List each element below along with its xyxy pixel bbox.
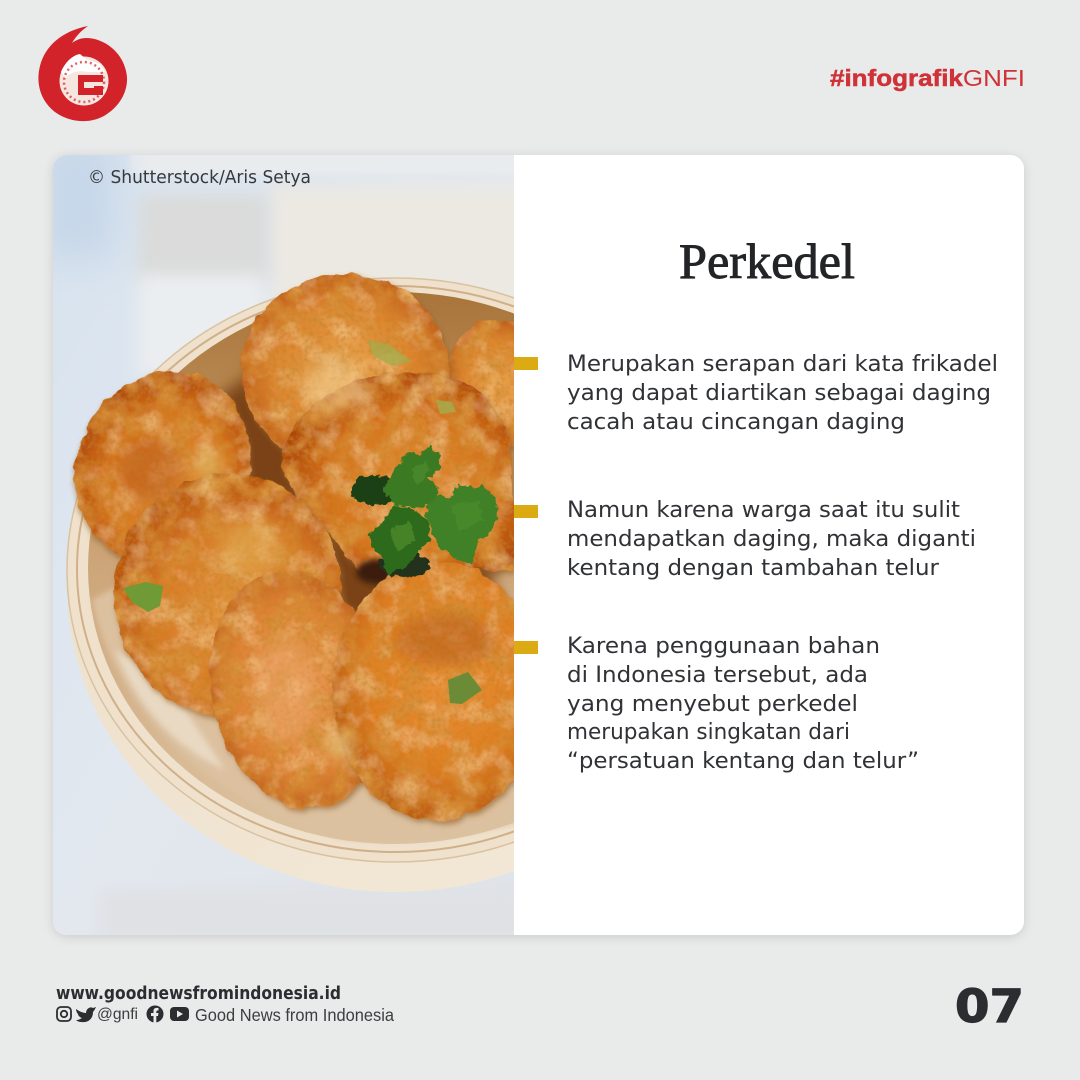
title: Perkedel: [679, 233, 855, 289]
text block 1: [567, 351, 998, 435]
text block 3: Karena penggunaan bahan: [567, 633, 880, 659]
bullet marker 2: [514, 505, 538, 518]
patties: [70, 272, 514, 828]
icon: twitter: [76, 1007, 96, 1022]
shadow beneath patties: [218, 370, 506, 612]
green specks: [123, 582, 163, 612]
highlights and browning: [118, 359, 495, 759]
page number: 07: [955, 980, 1024, 1033]
patty: lower middle: [208, 570, 366, 816]
baking paper: [90, 586, 514, 842]
footer: website: www.goodnewsfromindonesia.id: [56, 983, 341, 1004]
text block 2: [567, 497, 976, 581]
text block 2: Namun karena warga saat itu sulit: [567, 497, 960, 523]
patty: centre: [284, 372, 515, 580]
handle: @gnfi: [97, 1006, 138, 1023]
icon: facebook: [146, 1006, 164, 1023]
cloth backdrop: [40, 140, 530, 940]
patty: left: [70, 370, 253, 561]
text block 3: merupakan singkatan dari: [567, 719, 850, 745]
shadow between patties: [356, 559, 404, 585]
steamer rim: [66, 277, 514, 863]
footer: social row: [57, 1005, 394, 1025]
patty: top centre: [241, 274, 449, 468]
logo: [38, 26, 127, 121]
patty: right top: [448, 320, 514, 451]
text block 3: yang menyebut perkedel: [567, 691, 858, 717]
steamer inner: [88, 292, 514, 844]
patty: left lower: [114, 473, 342, 717]
photo credit: © Shutterstock/Aris Setya: [88, 168, 311, 188]
text block 3: “persatuan kentang dan telur”: [567, 748, 919, 774]
hashtag: #infografik GNFI: [830, 65, 1025, 91]
bullet marker 3: [514, 641, 538, 654]
panel: text card right edge fill: [514, 155, 1024, 935]
text block 1: cacah atau cincangan daging: [567, 409, 905, 435]
icon: youtube: [170, 1007, 189, 1021]
panel: food photo: [53, 155, 514, 935]
text block 2: kentang dengan tambahan telur: [567, 555, 940, 581]
marble background: [53, 155, 514, 935]
text block 1: Merupakan serapan dari kata frikadel: [567, 351, 998, 377]
steamer outer wall: [67, 592, 514, 892]
parsley garnish: [351, 446, 497, 577]
text block 1: yang dapat diartikan sebagai daging: [567, 380, 991, 406]
channel name: Good News from Indonesia: [195, 1005, 394, 1025]
panel: card shadow: [53, 155, 1024, 935]
bullet marker 1: [514, 357, 538, 370]
icon: instagram: [57, 1007, 71, 1021]
text block 3: [567, 633, 919, 774]
patty: lower right: [333, 561, 541, 821]
text block 3: di Indonesia tersebut, ada: [567, 662, 868, 688]
text block 2: mendapatkan daging, maka diganti: [567, 526, 976, 552]
